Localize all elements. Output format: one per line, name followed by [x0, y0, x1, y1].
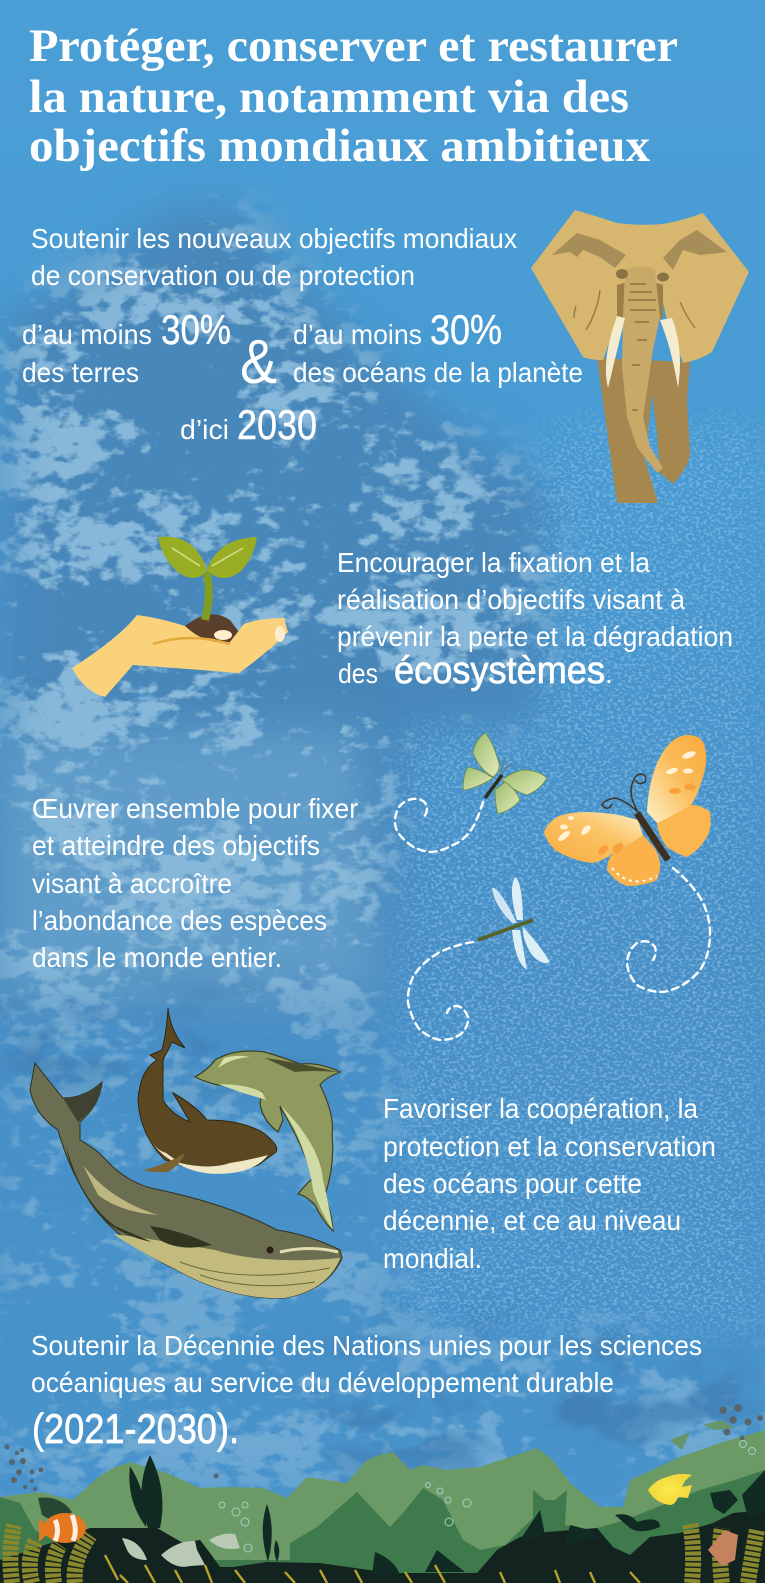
text block: species: l’abondance des espèces [32, 905, 327, 936]
text block: 30% targets: de conservation ou de protection [31, 260, 415, 291]
text block: 30% targets: 2030 [237, 401, 317, 448]
text block: ecosystems [337, 547, 733, 692]
text block: UN decade [31, 1330, 702, 1452]
icon: orange butterfly [544, 735, 711, 886]
text block: species [32, 793, 358, 973]
text block: ocean cooperation: mondial. [383, 1243, 482, 1274]
dark foreground reef [0, 1510, 765, 1583]
text block: UN decade: Soutenir la Décennie des Nations unies pour les sciences [31, 1330, 702, 1361]
icon: hand holding seedling [72, 537, 288, 697]
icon: striped fish [122, 1534, 240, 1567]
text block: ecosystems: prévenir la perte et la dégradation [337, 621, 733, 652]
text block: 30% targets: des terres [22, 357, 139, 388]
text block: 30% targets: d’au moins [293, 319, 422, 350]
text block: ocean cooperation: des océans pour cette [383, 1168, 642, 1199]
text block: ocean cooperation [383, 1093, 716, 1274]
text block: UN decade: (2021-2030). [32, 1405, 239, 1452]
icon: elephant [531, 210, 749, 503]
text block: ecosystems: des [338, 658, 378, 689]
dark green hills [0, 1470, 765, 1583]
kelp and plant silhouettes [38, 1455, 765, 1575]
air bubbles [219, 1440, 756, 1552]
text block: species: visant à accroître [32, 868, 232, 899]
text block: 30% targets [22, 223, 583, 448]
text block: ecosystems: Encourager la fixation et la [337, 547, 650, 578]
icon: marine animals [30, 1008, 342, 1298]
light green reef [0, 1430, 765, 1583]
title [29, 20, 678, 172]
icon: butterflies and dragonfly [395, 733, 711, 1040]
flight path: dashed spirals [395, 799, 710, 1040]
text block: ocean cooperation: décennie, et ce au niveau [383, 1205, 681, 1236]
text block: ocean cooperation: Favoriser la coopération, la [383, 1093, 698, 1124]
text block: species: Œuvrer ensemble pour fixer [32, 793, 358, 824]
icon: green background fish [670, 1420, 735, 1450]
icon: yellow fish [648, 1474, 692, 1505]
text block: 30% targets: & [240, 328, 277, 397]
text block: ecosystems: . [605, 658, 613, 689]
yellow seaweed [10, 1523, 757, 1583]
text block: 30% targets: des océans de la planète [293, 357, 583, 388]
text block: ecosystems: écosystèmes [394, 650, 605, 692]
icon: coral on the right [708, 1530, 738, 1566]
text block: ocean cooperation: protection et la conservation [383, 1131, 716, 1162]
text block: 30% targets: Soutenir les nouveaux objectifs mondiaux [31, 223, 517, 254]
text block: species: et atteindre des objectifs [32, 830, 320, 861]
text block: 30% targets: 30% [161, 306, 231, 353]
text block: 30% targets: 30% [430, 306, 502, 353]
icon: green butterfly [463, 733, 547, 814]
text block: species: dans le monde entier. [32, 942, 282, 973]
text block: 30% targets: d’au moins [22, 319, 152, 350]
icon: whale [30, 1063, 342, 1298]
title: objectifs mondiaux ambitieux [29, 120, 651, 172]
title: la nature, notamment via des [29, 71, 629, 123]
icon: clownfish [39, 1513, 86, 1543]
icon: dragonfly [478, 877, 550, 970]
reef scene at the bottom [0, 1404, 765, 1583]
text block: 30% targets: d’ici [180, 414, 229, 445]
text block: ecosystems: réalisation d’objectifs visant à [337, 584, 685, 615]
text block: UN decade: océaniques au service du développement durable [31, 1367, 614, 1398]
icon: shark [138, 1008, 277, 1174]
icon: school of small fish [4, 1404, 763, 1491]
title: Protéger, conserver et restaurer [29, 20, 678, 72]
icon: dolphin [195, 1051, 340, 1231]
